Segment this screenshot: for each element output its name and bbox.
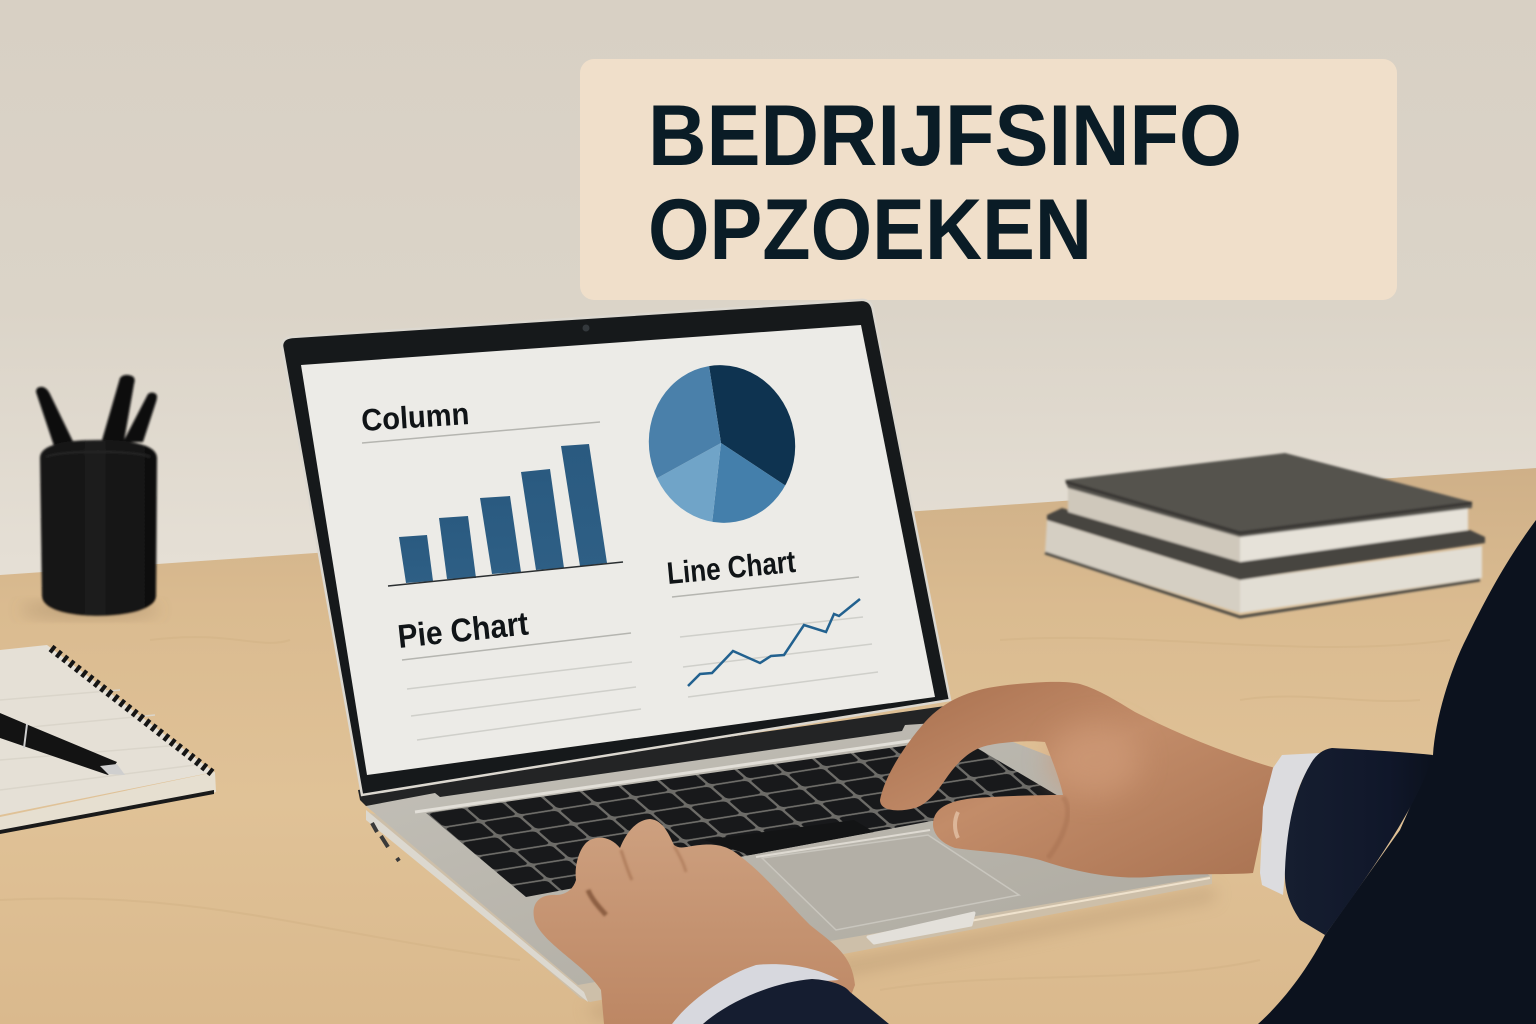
laptop lid <box>282 300 950 795</box>
finger folds <box>588 846 686 915</box>
heading: Pie Chart: Pie Chart <box>396 604 530 655</box>
title text: BEDRIJFSINFO <box>648 88 1242 184</box>
left jacket sleeve <box>703 979 889 1024</box>
hinge <box>358 706 950 806</box>
knuckle highlight <box>1050 725 1140 795</box>
title text: OPZOEKEN <box>648 182 1092 278</box>
heading: Line Chart: Line Chart <box>665 544 797 591</box>
jacket sleeve <box>1285 748 1433 935</box>
stacked books <box>1045 453 1485 617</box>
keyboard lower highlight <box>756 830 930 857</box>
left hand <box>534 819 889 1024</box>
ports <box>372 823 399 861</box>
laptop screen <box>301 325 935 775</box>
keyboard <box>426 738 1060 897</box>
bottom book <box>1045 520 1482 613</box>
jacket body <box>1258 520 1536 1024</box>
right hand <box>880 682 1275 878</box>
left shirt cuff <box>672 964 839 1024</box>
pie chart section <box>396 604 641 740</box>
pie chart <box>648 365 796 523</box>
right shirt cuff <box>1260 753 1320 895</box>
thumbnail <box>955 812 958 838</box>
pen holder with pens <box>20 375 160 618</box>
column chart <box>360 396 623 586</box>
jacket <box>1258 520 1536 1024</box>
laptop <box>282 300 1215 1020</box>
laptop shadow <box>585 888 1215 1020</box>
line chart section <box>665 544 878 697</box>
keyboard top highlight <box>415 740 916 812</box>
wooden desk <box>0 468 1536 1024</box>
top book <box>1068 485 1468 562</box>
front notch <box>868 913 974 943</box>
pen <box>0 713 125 775</box>
notebook with pen <box>0 645 216 834</box>
heading: Column: Column <box>360 396 470 438</box>
laptop base <box>358 706 1212 1002</box>
webcam <box>582 324 590 332</box>
spiral binding <box>51 648 212 773</box>
space bar <box>704 820 874 855</box>
trackpad <box>762 835 1019 930</box>
title card <box>580 59 1397 300</box>
